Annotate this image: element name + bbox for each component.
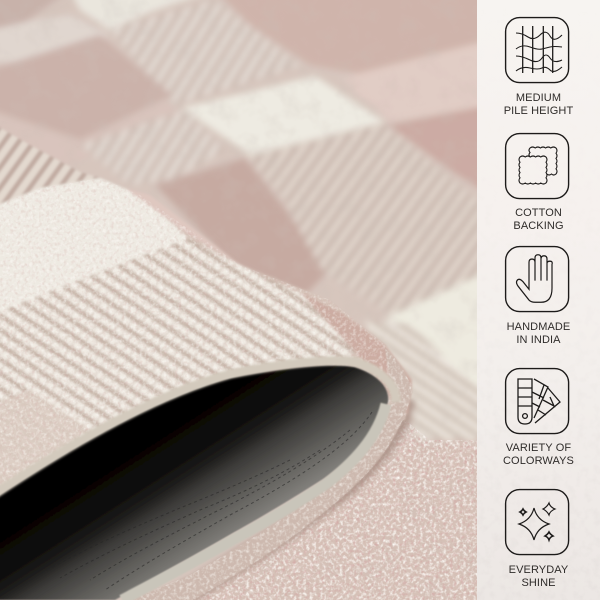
icon: colorways fan: [504, 368, 570, 434]
underside weave dashes: [30, 412, 372, 590]
label: variety of colorways: COLORWAYS: [503, 455, 574, 467]
label: everyday shine: [509, 564, 568, 589]
label: variety of colorways: VARIETY OF: [506, 442, 571, 454]
icon: sparkles: [504, 488, 570, 556]
label: handmade in india: IN INDIA: [516, 334, 561, 346]
label: medium pile height: MEDIUM: [516, 92, 561, 104]
label: medium pile height: [504, 92, 573, 116]
rug lip: [0, 361, 396, 494]
icon: medium pile height: [504, 16, 570, 84]
label: medium pile height: PILE HEIGHT: [504, 104, 573, 116]
label: cotton backing: COTTON: [515, 207, 562, 219]
underside binding: [122, 404, 386, 600]
label: handmade in india: [507, 321, 570, 346]
label: everyday shine: EVERYDAY: [509, 564, 568, 576]
label: cotton backing: [513, 207, 564, 232]
icon: cotton backing: [504, 132, 570, 200]
rug photo: [0, 0, 477, 600]
rolled rug edge band: [136, 350, 412, 600]
icon: handmade: [504, 246, 570, 312]
label: variety of colorways: [503, 442, 574, 467]
rolled rug top surface: [0, 122, 420, 510]
label: cotton backing: BACKING: [513, 220, 564, 232]
label: everyday shine: SHINE: [521, 577, 556, 589]
rug underside: [0, 365, 388, 600]
sidebar panel: [477, 0, 600, 600]
label: handmade in india: HANDMADE: [507, 321, 570, 333]
shadow under roll: [150, 400, 415, 600]
